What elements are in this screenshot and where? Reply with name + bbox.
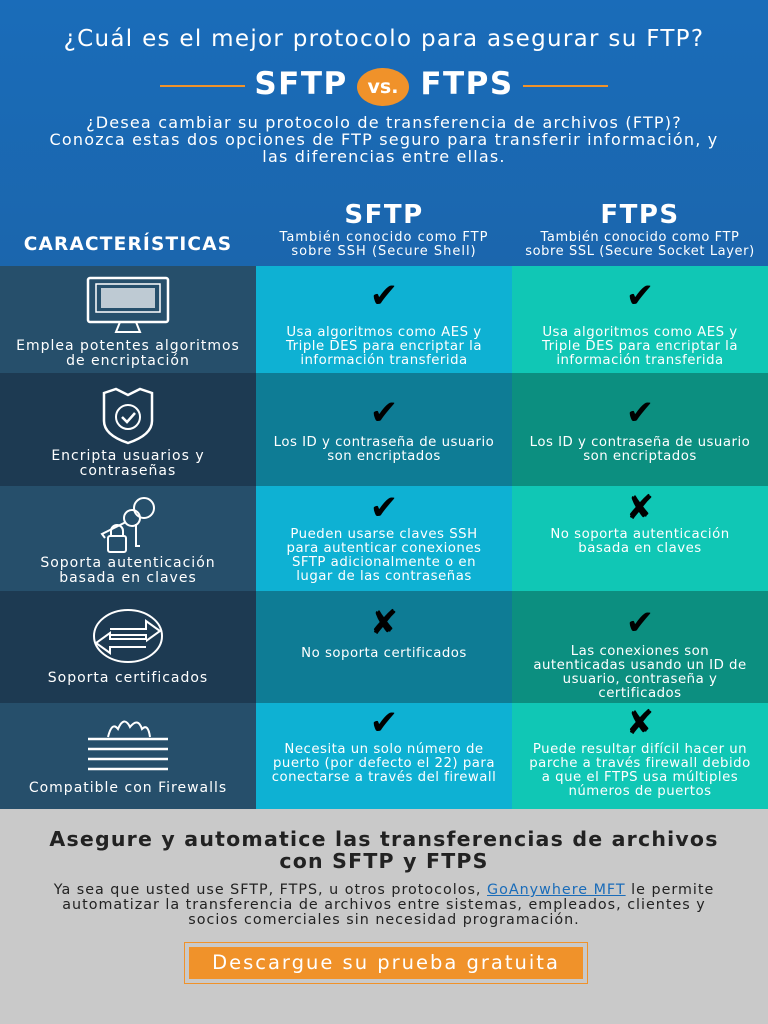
feature: firewalls: Compatible con Firewalls [29,780,227,796]
feature: encryption: Emplea potentes algoritmos [16,338,240,354]
row 1: encryption [0,266,768,373]
footer heading: Asegure y automatice las transferencias de archivos [49,827,719,851]
FTPS cell: certificados [598,686,682,701]
SFTP cell [256,591,512,703]
feature: certificates: Soporta certificados [48,670,208,686]
SFTP cell: puerto (por defecto el 22) para [273,756,495,771]
footer text: Ya sea que usted use SFTP, FTPS, u otros protocolos, GoAnywhere MFT le permite [54,882,714,898]
column header: FTPS [525,200,755,259]
FTPS cell [512,591,768,703]
feature: key auth: basada en claves [59,570,197,586]
intro text: Conozca estas dos opciones de FTP seguro para transferir información, y [50,130,718,149]
footer text: socios comerciales sin necesidad programación. [188,912,580,928]
FTPS cell: información transferida [556,353,724,368]
FTPS cell [512,373,768,486]
FTPS cell: a que el FTPS usa múltiples [542,770,738,785]
SFTP cell: Los ID y contraseña de usuario [274,435,494,450]
title: ¿Cuál es el mejor protocolo para asegurar su FTP? [64,26,704,52]
row 5: firewalls [0,703,768,809]
footer heading [49,827,719,873]
FTPS cell: Las conexiones son [571,644,709,659]
row 4: certificates [0,591,768,703]
button: Descargue su prueba gratuita [212,951,560,974]
FTPS cell: son encriptados [583,449,697,464]
FTPS cell: Los ID y contraseña de usuario [530,435,750,450]
column header: FTPS: sobre SSL (Secure Socket Layer) [525,244,755,259]
column header: FTPS: FTPS [600,200,680,230]
SFTP cell: SFTP adicionalmente o en [292,555,476,570]
intro text [50,113,718,166]
subtitle: SFTP vs FTPS: vs. [368,76,398,98]
FTPS cell: No soporta autenticación [550,527,730,542]
button [184,942,588,984]
SFTP cell [256,703,512,809]
SFTP cell: ✘ [370,603,398,643]
feature: encrypts users: contraseñas [80,463,176,479]
FTPS cell [512,703,768,809]
footer section [0,809,768,1024]
column header: SFTP [279,200,488,259]
SFTP cell: ✔ [370,703,398,743]
FTPS cell: ✘ [626,488,654,528]
row 3: keys [0,486,768,591]
row 2: passwords [0,373,768,486]
FTPS cell: basada en claves [578,541,702,556]
SFTP cell: ✔ [370,276,398,316]
SFTP cell: son encriptados [327,449,441,464]
feature: key auth [0,486,256,591]
icon: firewall [88,720,168,770]
subtitle: SFTP vs FTPS: FTPS [420,66,514,102]
FTPS cell: usuario, contraseña y [563,672,717,687]
SFTP cell: Triple DES para encriptar la [286,339,482,354]
SFTP cell: lugar de las contraseñas [296,569,472,584]
footer text [54,882,714,928]
feature: encryption [0,266,256,373]
SFTP cell [256,373,512,486]
SFTP cell: para autenticar conexiones [287,541,481,556]
feature: firewalls [0,703,256,809]
SFTP cell: Necesita un solo número de [284,742,484,757]
intro text: ¿Desea cambiar su protocolo de transferencia de archivos (FTP)? [86,113,682,132]
subtitle: SFTP vs FTPS: SFTP [254,66,348,102]
column header: características: CARACTERÍSTICAS [24,234,232,255]
feature: certificates [0,591,256,703]
column header: SFTP: sobre SSH (Secure Shell) [291,244,477,259]
FTPS cell: ✘ [626,703,654,743]
SFTP cell: Usa algoritmos como AES y [286,325,482,340]
FTPS cell [512,486,768,591]
icon: shield [102,388,154,444]
SFTP cell: ✔ [370,488,398,528]
footer text: automatizar la transferencia de archivos entre sistemas, empleados, clientes y [62,897,706,913]
subtitle: SFTP vs FTPS [160,66,608,106]
column header: FTPS: También conocido como FTP [541,230,739,245]
SFTP cell [256,486,512,591]
column header: SFTP: También conocido como FTP [280,230,488,245]
FTPS cell: ✔ [626,603,654,643]
SFTP cell [256,266,512,373]
SFTP cell: No soporta certificados [301,646,467,661]
icon: monitor [86,276,170,333]
FTPS cell: ✔ [626,276,654,316]
feature: key auth: Soporta autenticación [40,555,216,571]
icon: exchange arrows [93,609,163,663]
FTPS cell: autenticadas usando un ID de [533,658,747,673]
SFTP cell: conectarse a través del firewall [272,770,496,785]
SFTP cell: Pueden usarse claves SSH [290,527,478,542]
FTPS cell: números de puertos [568,784,712,799]
FTPS cell [512,266,768,373]
FTPS cell: Triple DES para encriptar la [542,339,738,354]
footer heading: con SFTP y FTPS [279,849,489,873]
feature: encrypts users [0,373,256,486]
intro text: las diferencias entre ellas. [262,147,506,166]
column header: SFTP: SFTP [344,200,424,230]
header [0,0,768,266]
FTPS cell: ✔ [626,393,654,433]
feature: encryption: de encriptación [66,353,190,369]
feature: encrypts users: Encripta usuarios y [51,448,205,464]
SFTP cell: ✔ [370,393,398,433]
SFTP cell: información transferida [300,353,468,368]
icon: keys and lock [100,497,155,553]
FTPS cell: parche a través firewall debido [529,756,751,771]
FTPS cell: Puede resultar difícil hacer un [533,742,747,757]
FTPS cell: Usa algoritmos como AES y [542,325,738,340]
